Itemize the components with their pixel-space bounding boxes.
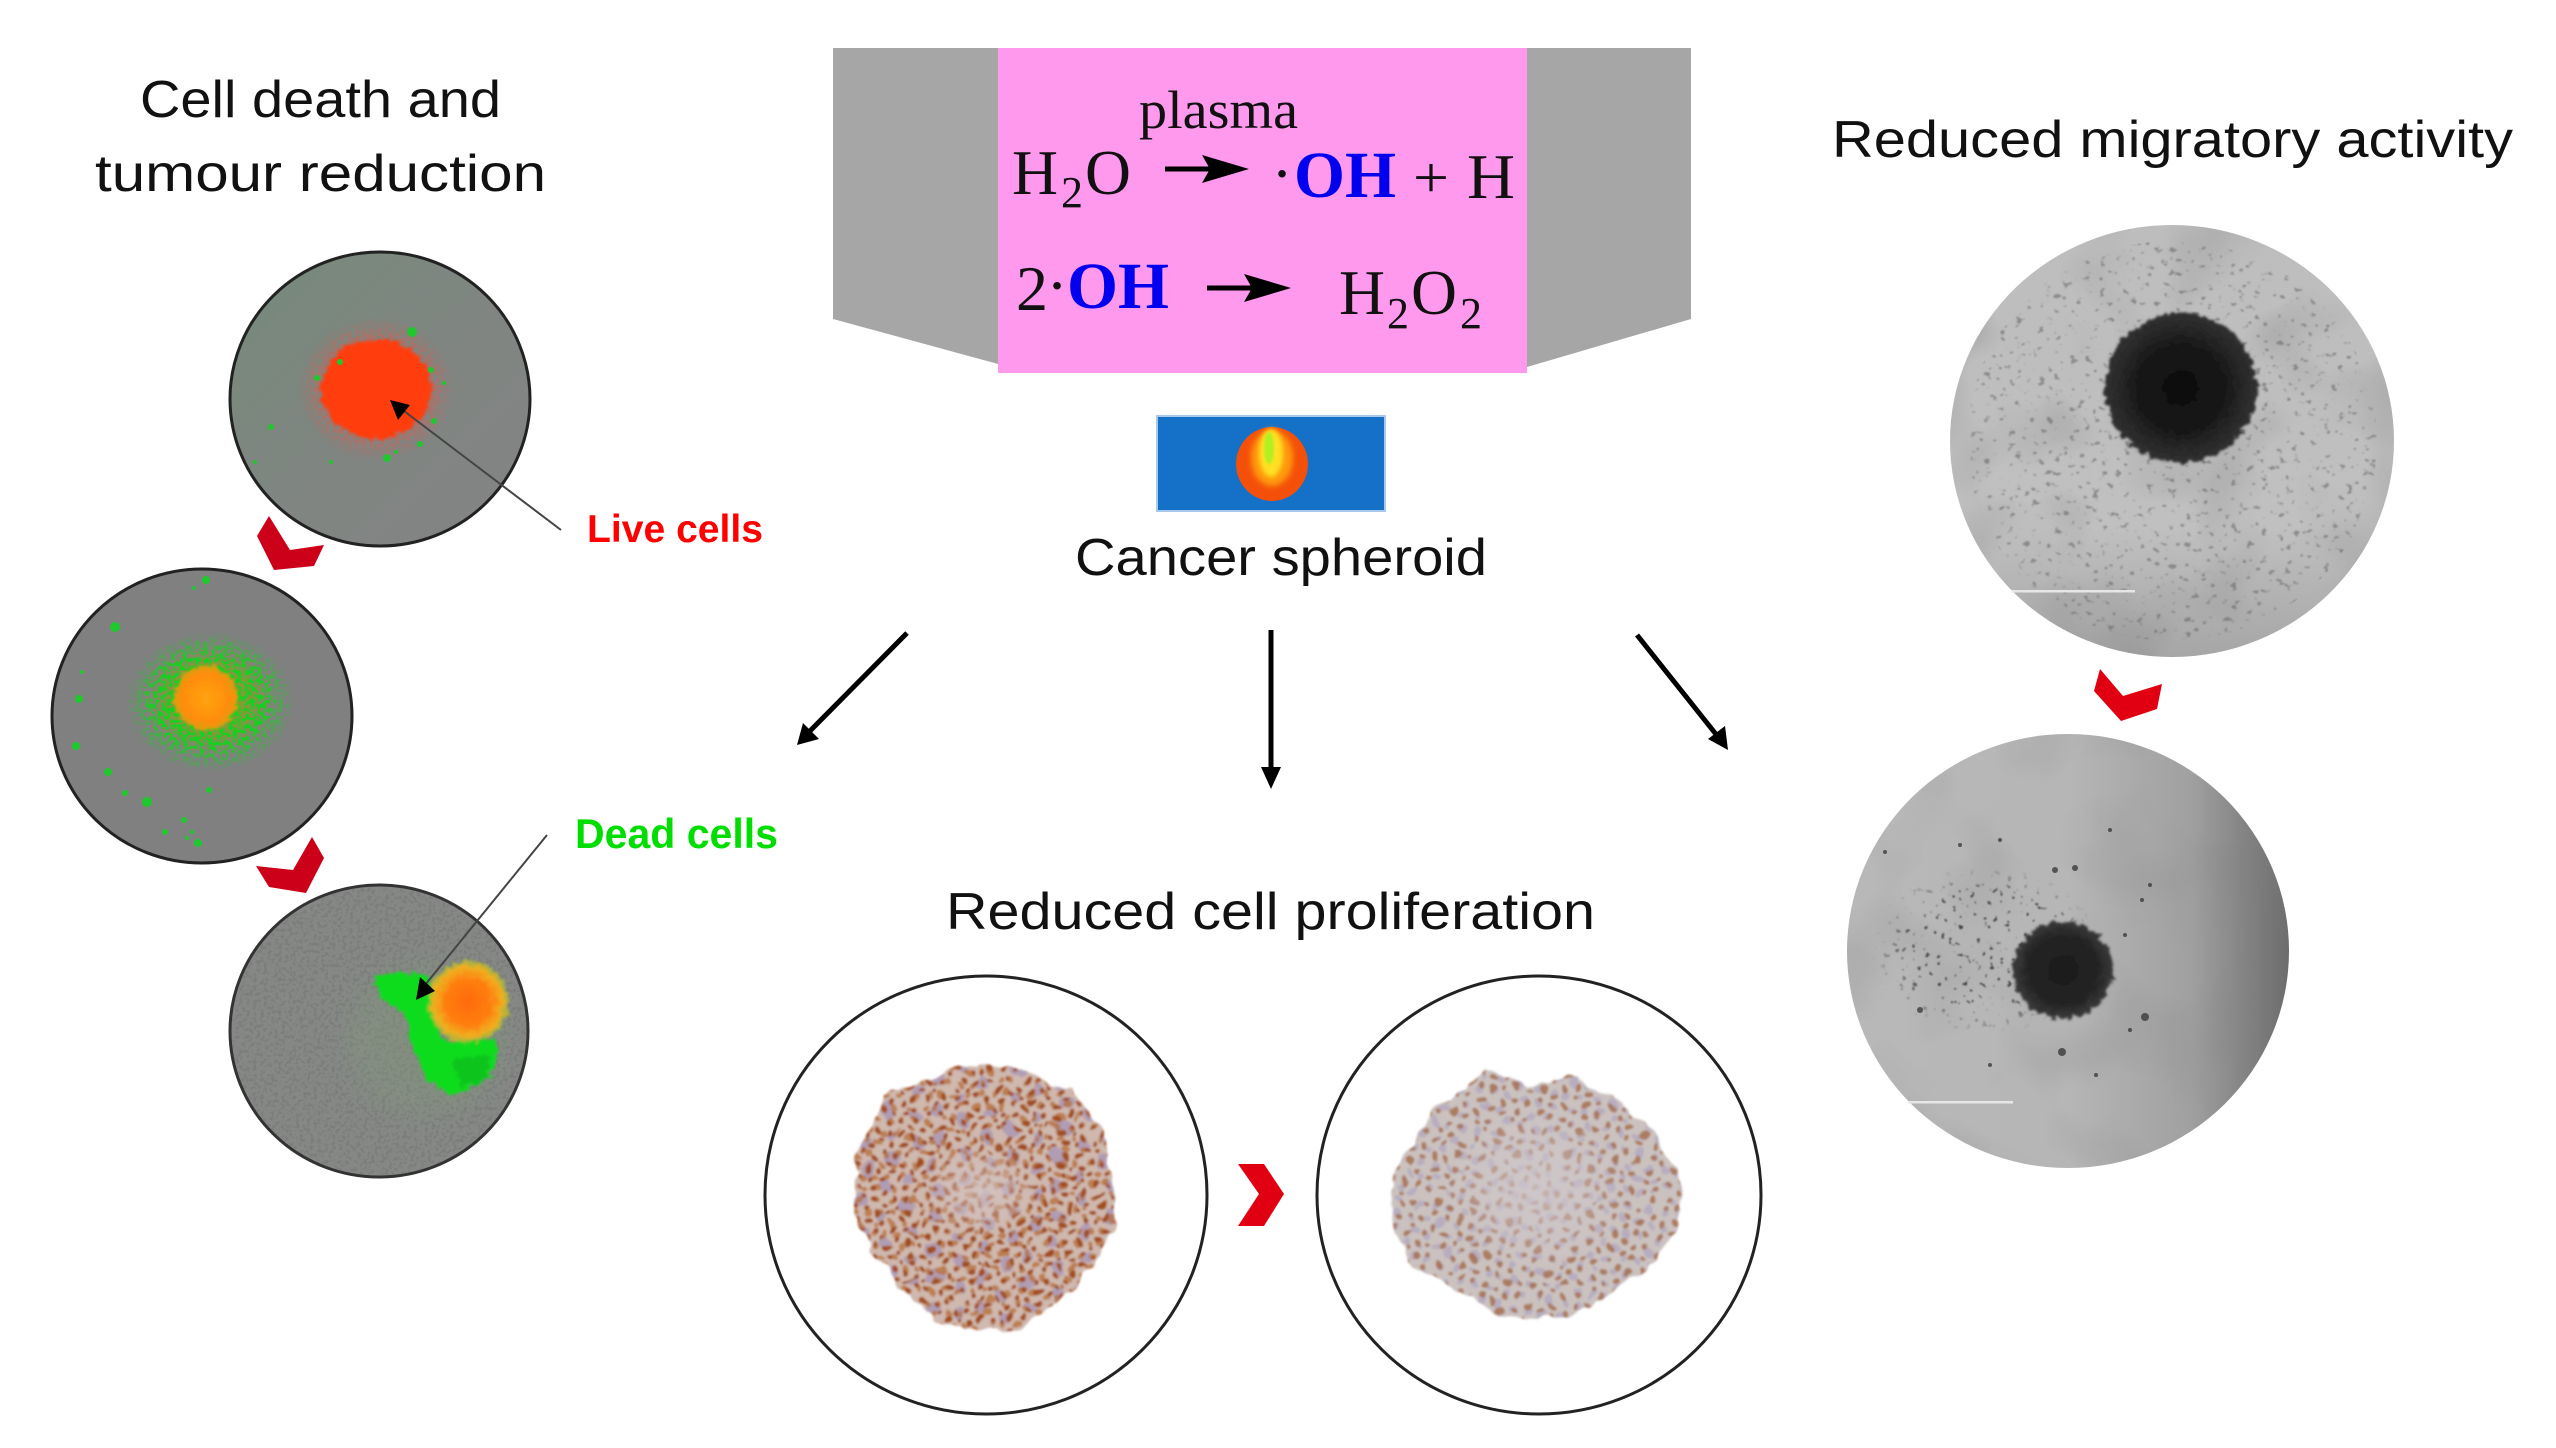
panel: plasma chemistry funnel — [833, 48, 1691, 373]
image: tissue after treatment — [1317, 976, 1761, 1414]
equation: hydrogen peroxide formation: 2 — [1016, 253, 1048, 324]
arrow: down chevron 1 — [257, 516, 324, 570]
equation: water dissociation: · — [1271, 138, 1293, 209]
equation: water dissociation: O — [1085, 137, 1131, 208]
arrow: pointer to live cells — [390, 400, 561, 530]
image: migration after treatment — [1847, 734, 2289, 1168]
equation: hydrogen peroxide formation: 2 — [1460, 289, 1482, 338]
image: tissue before treatment — [765, 976, 1207, 1414]
image: migration before treatment — [1950, 225, 2394, 657]
image: spheroid after treatment, dead cells — [230, 885, 528, 1177]
equation: water dissociation: OH — [1294, 139, 1396, 212]
heading: cell death and tumour reduction: Cell death and — [140, 71, 501, 129]
arrow: to cell death panel — [797, 633, 907, 745]
label: live cells: Live cells — [587, 508, 763, 551]
equation: water dissociation: 2 — [1061, 168, 1083, 217]
panel: reduced cell proliferation — [765, 883, 1761, 1414]
label: dead cells: Dead cells — [575, 810, 778, 857]
image: cancer spheroid — [1157, 416, 1385, 511]
label: cancer spheroid: Cancer spheroid — [1075, 529, 1487, 587]
heading: cell death and tumour reduction — [95, 71, 546, 203]
arrow: down chevron 3 — [2094, 669, 2162, 721]
heading: reduced cell proliferation: Reduced cell proliferation — [946, 883, 1595, 941]
heading: reduced migratory activity: Reduced migratory activity — [1832, 111, 2513, 169]
shape: pink plasma region — [998, 48, 1527, 373]
equation: hydrogen peroxide formation: O — [1411, 257, 1457, 328]
image: spheroid before treatment, live cells — [230, 252, 530, 546]
panel: cell death and tumour reduction — [52, 71, 778, 1177]
image: spheroid mid treatment — [52, 569, 352, 863]
arrow: to migratory panel — [1637, 635, 1728, 750]
equation: water dissociation — [1012, 137, 1515, 217]
equation: water dissociation: H — [1467, 141, 1515, 212]
equation: hydrogen peroxide formation: · — [1046, 250, 1068, 321]
arrow: pointer to dead cells — [416, 835, 547, 1000]
equation: water dissociation: H — [1012, 137, 1058, 208]
panel: reduced migratory activity — [1832, 111, 2513, 1168]
shape: grey plasma nozzle — [833, 48, 1691, 367]
equation: hydrogen peroxide formation: 2 — [1387, 289, 1409, 338]
equation: hydrogen peroxide formation — [1016, 250, 1482, 338]
equation: plasma label: plasma — [1139, 80, 1298, 140]
equation: water dissociation: + — [1413, 145, 1449, 210]
arrow: right chevron — [1238, 1164, 1284, 1226]
equation: hydrogen peroxide formation: OH — [1067, 250, 1169, 323]
arrow: to proliferation panel — [1261, 630, 1281, 789]
equation: hydrogen peroxide formation: H — [1339, 257, 1385, 328]
heading: cell death and tumour reduction: tumour reduction — [95, 145, 546, 203]
arrow: down chevron 2 — [256, 837, 324, 893]
